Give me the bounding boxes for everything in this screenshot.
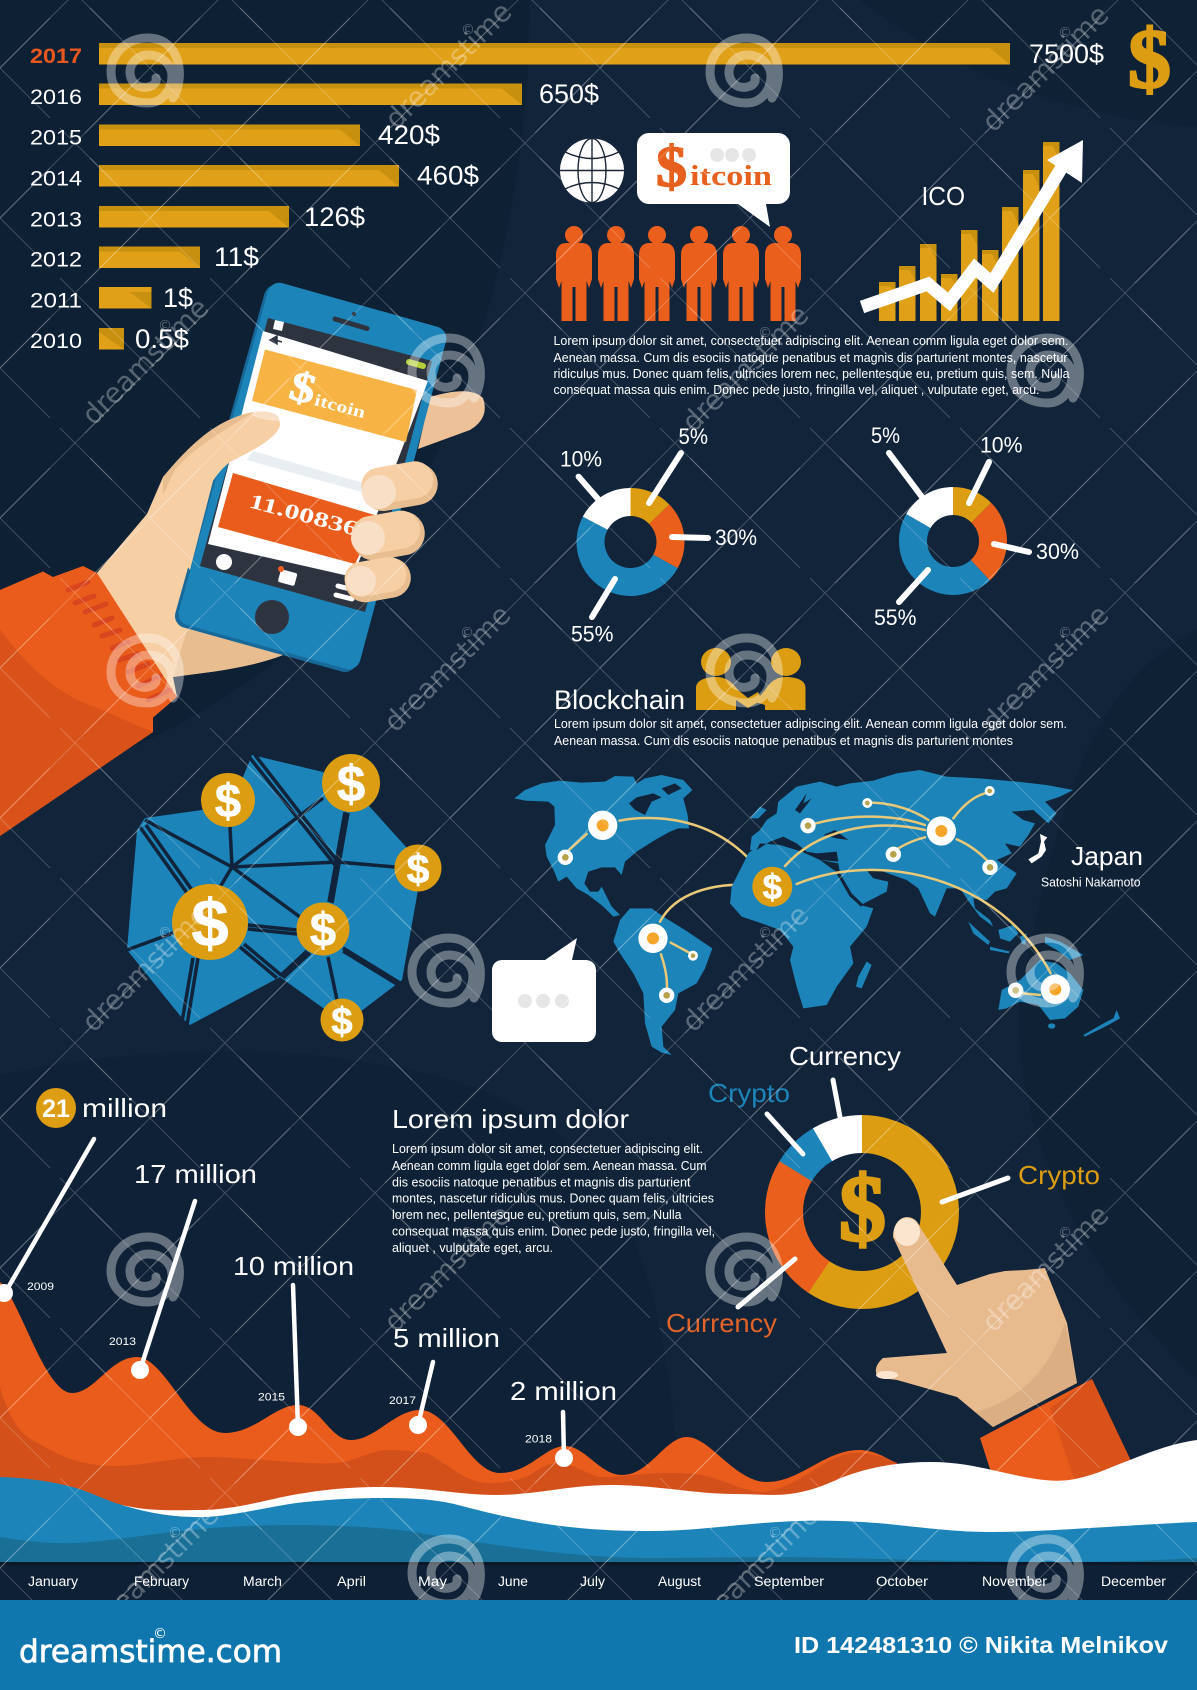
hand: three fingers — [342, 458, 441, 605]
heading: ICO: ICO — [922, 181, 965, 211]
hand holding phone — [0, 295, 485, 836]
bar row 2014 — [30, 160, 479, 190]
phone — [187, 295, 434, 660]
text block: lower paragraph: Aenean comm ligula eget dolor sem. Aenean massa. Cum — [392, 1159, 706, 1173]
text block: Blockchain paragraph: Lorem ipsum dolor sit amet, consectetuer adipiscing elit. Aenean comm ligula eget dolor sem. — [554, 717, 1067, 731]
Hudson Bay — [629, 783, 682, 815]
watermark lattice and marks: dreamstime — [75, 291, 215, 431]
text block: Blockchain paragraph — [554, 717, 1067, 748]
donut chart right: 30% — [1036, 539, 1079, 564]
coins — [172, 754, 442, 1043]
large donut chart: Currency — [666, 1308, 777, 1338]
South America — [613, 908, 712, 1055]
watermark lattice and marks: © — [1058, 1225, 1072, 1241]
bar row 2012: 2012 — [30, 248, 82, 272]
coin on map: $ — [763, 868, 782, 907]
month axis bar: December — [1101, 1574, 1167, 1589]
marker 2013: 17 million — [109, 1159, 257, 1379]
watermark lattice and marks: dreamstime — [675, 298, 815, 438]
watermark lattice and marks: dreamstime — [377, 598, 517, 738]
darker orange area — [0, 1387, 897, 1530]
network polygon — [127, 755, 418, 1025]
watermark lattice and marks: dreamstime — [75, 898, 215, 1038]
white wave — [122, 1440, 1197, 1540]
month axis bar: August — [658, 1574, 701, 1589]
donut chart right: 5% — [871, 423, 900, 448]
UK — [750, 807, 767, 818]
icon: Japan — [1028, 834, 1047, 863]
bar row 2017 — [30, 39, 1104, 69]
marker 2015: 10 million: 10 million — [233, 1251, 354, 1281]
footer logo: dreamstime.com — [19, 1634, 282, 1670]
seas — [757, 793, 848, 862]
text block: lower paragraph: dis esociis natoque penatibus et magnis dis parturient — [392, 1176, 691, 1190]
bar row 2015: 420$ — [378, 120, 440, 150]
text block: lower paragraph: consequat massa quis enim. Donec pede justo, fringilla vel, — [392, 1224, 715, 1238]
phone banner: Bitcoin logo — [285, 363, 374, 428]
orange area — [0, 1282, 897, 1530]
coins: $ — [191, 886, 229, 961]
footer credit: ID 142481310 © Nikita Melnikov — [794, 1632, 1168, 1658]
watermark lattice and marks: © — [460, 625, 474, 641]
bar row 2012: 11$ — [214, 242, 259, 272]
bar row 2010: 2010 — [30, 330, 82, 353]
donut chart left: 5% — [678, 424, 708, 449]
sleeve: pointing arm — [980, 1379, 1140, 1500]
islands — [856, 922, 1120, 1037]
marker 2018: 2 million: 2018 — [525, 1434, 552, 1446]
watermark lattice and marks: © — [158, 318, 172, 334]
deep blue wave — [0, 1525, 1197, 1565]
large donut chart: Crypto — [1018, 1160, 1100, 1190]
watermark lattice and marks: dreamstime — [975, 0, 1115, 138]
donut chart right: 10% — [980, 432, 1022, 458]
marker 2018: 2 million — [510, 1376, 617, 1467]
month axis bar — [0, 1562, 1197, 1600]
month axis bar: January — [28, 1574, 78, 1589]
text block: Blockchain paragraph: Aenean massa. Cum dis esociis natoque penatibus et magnis dis parturient montes — [554, 734, 1013, 748]
bar row 2014: 2014 — [30, 168, 82, 190]
sleeve — [0, 566, 177, 836]
hand shape — [876, 1217, 1077, 1427]
watermark lattice and marks: © — [460, 1225, 474, 1241]
bar row 2013 — [30, 202, 365, 232]
network of coins — [127, 754, 442, 1043]
marker 2009: 21 million — [0, 1088, 167, 1302]
marker 2009: 21 million: 2009 — [27, 1281, 54, 1293]
coins: $ — [215, 774, 241, 827]
icon: handshake — [696, 648, 806, 710]
Africa — [730, 843, 873, 1008]
marker 2015: 10 million: 2015 — [258, 1392, 285, 1404]
text block: lower paragraph: Lorem ipsum dolor sit amet, consectetuer adipiscing elit. — [392, 1142, 703, 1156]
hand: palm — [60, 470, 300, 697]
marker 2009: 21 million: million — [82, 1093, 167, 1123]
watermark lattice and marks: dreamstime — [685, 1498, 825, 1638]
month axis bar: September — [754, 1574, 825, 1589]
month axis bar: November — [982, 1574, 1048, 1589]
watermark lattice and marks: © — [461, 22, 475, 38]
watermark lattice and marks: © — [1058, 625, 1072, 641]
bar row 2017: 2017 — [30, 45, 82, 68]
month axis bar: June — [498, 1574, 528, 1589]
label: Japan: Japan — [1071, 841, 1143, 871]
text block: intro paragraph: consequat massa quis enim. Donec pede justo, fringilla vel, aliquet , vulputate eget, arcu. — [554, 383, 1040, 397]
watermark lattice and marks: © — [768, 1525, 782, 1541]
Eurasia routes — [785, 793, 1051, 995]
phone banner: Bitcoin logo: $ — [285, 363, 321, 414]
bar row 2017: 7500$ — [1029, 39, 1104, 69]
map: Americas — [514, 775, 757, 1055]
month axis bar: May — [418, 1574, 447, 1589]
bar row 2016: 650$ — [539, 79, 599, 109]
footer bar — [0, 1600, 1197, 1690]
marker 2017: 5 million: 2017 — [389, 1395, 416, 1407]
bar row 2016: 2016 — [30, 86, 82, 109]
donut chart left: 30% — [715, 525, 757, 550]
blue wave — [0, 1477, 1197, 1565]
donut chart right — [871, 423, 1079, 630]
watermark lattice and marks: © — [168, 1525, 182, 1541]
bar row 2011: 2011 — [30, 290, 82, 312]
marker 2018: 2 million: 2 million — [510, 1376, 617, 1406]
heading: Blockchain: Blockchain — [554, 685, 685, 715]
bar row 2011 — [30, 283, 193, 313]
text block: lower paragraph: montes, nascetur ridiculus mus. Donec quam felis, ultricies — [392, 1192, 714, 1206]
watermark lattice and marks: © — [758, 925, 772, 941]
bar row 2011: 1$ — [163, 283, 193, 313]
ICO bar chart with arrow — [862, 140, 1083, 321]
marker 2017: 5 million: 5 million — [393, 1323, 500, 1353]
marker 2013: 17 million: 2013 — [109, 1336, 136, 1348]
month axis bar: October — [876, 1574, 929, 1589]
North America — [514, 775, 692, 917]
donut chart left: 55% — [571, 622, 614, 646]
coins: $ — [337, 755, 365, 812]
map: Eurasia, Africa, Australia — [730, 770, 1120, 1037]
text block: intro paragraph: ridiculus mus. Donec quam felis, ultricies lorem nec, pellentesque eu, pretium quis, sem. Nulla — [554, 367, 1070, 381]
text block: intro paragraph: Aenean massa. Cum dis esociis natoque penatibus et magnis dis parturient montes, nascetur — [554, 351, 1068, 365]
coins: $ — [310, 903, 336, 956]
Eurasia — [750, 770, 1073, 927]
phone amount: 11.00836 — [247, 489, 361, 541]
pointing hand — [876, 1217, 1140, 1500]
Eurasia nodes — [800, 786, 1070, 1004]
icon: big dollar sign: $ — [1128, 12, 1171, 106]
text block: intro paragraph: Lorem ipsum dolor sit amet, consectetuer adipiscing elit. Aenean comm ligula eget dolor sem. — [554, 334, 1068, 348]
marker 2009: 21 million: 21 — [42, 1095, 70, 1123]
bar row 2015 — [30, 120, 440, 150]
bar row 2010: 0.5$ — [135, 324, 189, 354]
marker 2015: 10 million — [233, 1251, 354, 1436]
speech bubble: Bitcoin: $ — [656, 134, 687, 199]
watermark lattice and marks: dreamstime — [675, 898, 815, 1038]
heading: Lorem ipsum dolor: Lorem ipsum dolor — [392, 1104, 629, 1134]
watermark lattice and marks: © — [158, 925, 172, 941]
watermark lattice and marks: © — [1058, 25, 1072, 41]
text block: lower paragraph: aliquet , vulputate eget, arcu. — [392, 1241, 553, 1255]
bar chart: price by year — [30, 39, 1104, 354]
watermark lattice and marks: dreamstime — [975, 598, 1115, 738]
label: Satoshi Nakamoto: Satoshi Nakamoto — [1041, 876, 1141, 890]
marker 2013: 17 million: 17 million — [134, 1159, 257, 1189]
speech bubble: chat — [492, 938, 596, 1042]
donut chart right: 55% — [874, 605, 916, 630]
bar row 2012 — [30, 242, 259, 272]
speech bubble: Bitcoin — [637, 133, 790, 227]
donut chart left — [560, 424, 757, 646]
month axis bar: February — [134, 1574, 189, 1589]
bar row 2013: 2013 — [30, 208, 82, 232]
watermark lattice and marks: © — [758, 325, 772, 341]
icon: globe — [560, 138, 624, 202]
icon: row of people — [556, 226, 801, 321]
watermark lattice and marks: dreamstime — [85, 1498, 225, 1638]
hand: fingers behind phone — [418, 391, 485, 449]
hand: thumb — [150, 412, 280, 570]
month axis bar: July — [580, 1574, 605, 1589]
text block: intro paragraph — [554, 334, 1070, 397]
month axis bar: March — [243, 1574, 282, 1589]
bar row 2014: 460$ — [417, 160, 479, 190]
bar row 2010 — [30, 324, 189, 354]
Americas routes — [569, 818, 757, 988]
bar row 2015: 2015 — [30, 126, 82, 150]
footer copyright mark: © — [153, 1626, 167, 1642]
speech bubble: Bitcoin: itcoin — [690, 161, 773, 192]
coins: $ — [407, 846, 430, 892]
text block: lower paragraph: lorem nec, pellentesque eu, pretium quis, sem. Nulla — [392, 1208, 682, 1222]
coin on map — [752, 867, 792, 907]
bar row 2013: 126$ — [304, 202, 365, 232]
text block: lower paragraph — [392, 1142, 715, 1255]
Americas nodes — [558, 811, 698, 1003]
icon: dollar in donut: $ — [839, 1157, 886, 1261]
phone banner: Bitcoin logo: itcoin — [312, 390, 368, 422]
large donut chart: Crypto — [708, 1078, 790, 1108]
world map — [514, 770, 1120, 1055]
donut chart left: 10% — [560, 446, 602, 472]
large donut chart — [666, 1041, 1100, 1338]
network links — [127, 755, 400, 1025]
coins: $ — [331, 1001, 353, 1043]
area chart: supply over years — [0, 1088, 1197, 1565]
watermark lattice and marks: dreamstime — [975, 1198, 1115, 1338]
large donut chart: Currency — [789, 1041, 901, 1071]
marker 2017: 5 million — [389, 1323, 500, 1434]
watermark lattice and marks: dreamstime — [377, 1198, 517, 1338]
month axis bar: April — [337, 1574, 366, 1589]
bar row 2016 — [30, 79, 599, 109]
